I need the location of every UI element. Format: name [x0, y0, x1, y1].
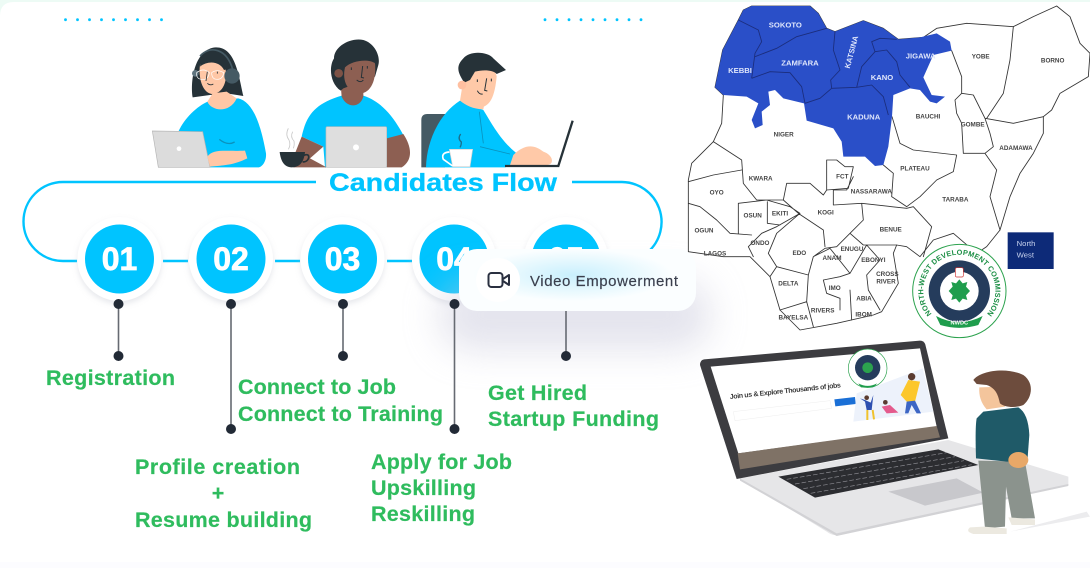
- step 04: [412, 217, 496, 301]
- connector 04: [450, 299, 460, 434]
- other state names: NASSARAWA: [851, 188, 892, 195]
- label: Profile creation + Resume building: [135, 455, 312, 532]
- blue state names: JIGAWA: [906, 52, 936, 61]
- other state names: GOMBE: [961, 121, 985, 128]
- other state names: [694, 54, 1065, 321]
- label: Get Hired / Startup Funding: Startup Funding: [488, 407, 659, 431]
- step 04: 04: [436, 241, 472, 277]
- shadow: [1010, 512, 1090, 532]
- step 05: [524, 217, 608, 301]
- step 02: 02: [213, 241, 249, 277]
- woman with headphones: [152, 47, 266, 167]
- other state names: BORNO: [1041, 58, 1065, 65]
- other state names: EBONYI: [861, 257, 886, 264]
- other state names: ADAMAWA: [999, 145, 1033, 152]
- label: Connect to Job / Training: Connect to Training: [238, 402, 443, 426]
- label: Get Hired / Startup Funding: Get Hired: [488, 381, 587, 405]
- other state names: BAYELSA: [778, 314, 809, 321]
- state borders inside the North West: [738, 20, 910, 115]
- other state names: OSUN: [744, 213, 762, 220]
- other state names: BENUE: [880, 227, 902, 234]
- portal illustration: [853, 368, 933, 422]
- portal logo: [848, 349, 887, 388]
- logo: North-West Development Commission: NWDC: [951, 321, 968, 327]
- hands: [1008, 452, 1028, 468]
- trackpad: [888, 478, 983, 506]
- label: Apply for Job / Upskilling / Reskilling: Upskilling: [371, 476, 476, 500]
- blue state names: ZAMFARA: [781, 58, 819, 67]
- man in turtleneck at laptop: [421, 53, 573, 167]
- boy figure: [968, 370, 1090, 534]
- connector segments between steps: [163, 260, 524, 262]
- title: Candidates Flow: Candidates Flow: [329, 169, 558, 197]
- other state names: DELTA: [778, 281, 799, 288]
- other state names: ONDO: [750, 240, 770, 247]
- connector 05: [561, 304, 571, 361]
- decorative dots left: [64, 18, 163, 21]
- blue state names: KADUNA: [847, 113, 881, 122]
- step 01: 01: [102, 241, 137, 277]
- other state names: TARABA: [942, 197, 969, 204]
- other state names: RIVERS: [811, 308, 834, 315]
- keyboard: [778, 449, 978, 498]
- label: Get Hired / Startup Funding: [488, 381, 659, 431]
- label: Apply for Job / Upskilling / Reskilling: Reskilling: [371, 502, 475, 526]
- man with dark hair and coffee: [280, 40, 410, 167]
- popup shadow: [440, 280, 710, 350]
- laptop screen bezel: [700, 341, 948, 479]
- blue state names: KATSINA: [843, 34, 860, 69]
- logo: North-West Development Commission: [912, 244, 1006, 338]
- laptop base: [740, 440, 1068, 535]
- popup: Video Empowerment: [459, 249, 696, 311]
- step 03: 03: [325, 241, 360, 277]
- popup label: Video Empowerment: [530, 273, 679, 290]
- other state names: CROSS: [876, 271, 899, 278]
- other state names: YOBE: [972, 54, 990, 61]
- blue state names: SOKOTO: [769, 20, 802, 29]
- other state names: RIVER: [876, 278, 896, 285]
- other state names: EKITI: [772, 211, 788, 218]
- other state names: FCT: [836, 174, 849, 181]
- other state names: KOGI: [818, 210, 834, 217]
- other state names: ENUGU: [841, 246, 864, 253]
- map: Nigeria with North West highlighted: [688, 6, 1090, 338]
- step 05: 05: [548, 241, 584, 277]
- illustration: laptop showing job portal and boy looking at it: [700, 340, 1090, 536]
- label: Connect to Job / Training: Connect to Job: [238, 375, 396, 399]
- other state names: EDO: [792, 250, 806, 257]
- other state names: OYO: [710, 190, 724, 197]
- icon: video camera: [476, 258, 520, 302]
- label: Apply for Job / Upskilling / Reskilling: [371, 450, 512, 526]
- country outline: [688, 6, 1090, 330]
- logo: North-West Development Commission: NORTH-WEST DEVELOPMENT COMMISSION: [918, 250, 1000, 317]
- other state names: IMO: [829, 285, 841, 292]
- legend box: North West: North: [1017, 239, 1035, 248]
- other state names: KWARA: [749, 175, 773, 182]
- screen: job portal page: Join us & Explore Thousands of jobs: [729, 382, 841, 401]
- shoes: [968, 517, 1035, 534]
- step 01: [78, 217, 162, 301]
- label: Profile creation + Resume building: Resume building: [135, 508, 312, 532]
- other state names: OGUN: [694, 227, 714, 234]
- label: Connect to Job / Training: [238, 375, 443, 426]
- blue state names: [728, 20, 936, 122]
- other state names: PLATEAU: [900, 166, 930, 173]
- blue state names: KEBBI: [728, 66, 752, 75]
- connector 03: [338, 299, 348, 361]
- other state names: IBOM: [855, 312, 872, 319]
- legend box: North West: West: [1017, 250, 1035, 259]
- legend box: North West: [1008, 232, 1054, 269]
- other state names: LAGOS: [704, 251, 726, 258]
- screen: job portal page: [711, 348, 940, 469]
- jacket: [976, 407, 1029, 462]
- illustration: three candidates at laptops: [152, 40, 574, 168]
- trousers: [978, 461, 1035, 528]
- connector 02: [226, 299, 236, 434]
- other state names: NIGER: [774, 131, 794, 138]
- head: [979, 387, 1005, 409]
- other state names: BAUCHI: [916, 114, 941, 121]
- decorative dots right: [544, 18, 642, 21]
- flow loop line: [24, 182, 662, 261]
- other state names: ANAM: [823, 255, 841, 262]
- North West states (blue): [715, 6, 952, 166]
- blue state names: KANO: [871, 73, 893, 82]
- label: Profile creation + Resume building: +: [212, 481, 224, 505]
- state borders: [688, 27, 1043, 327]
- label: Apply for Job / Upskilling / Reskilling: Apply for Job: [371, 450, 512, 474]
- connector 01: [114, 299, 124, 361]
- label: Registration: Registration: [46, 366, 175, 390]
- step 02: [189, 217, 273, 301]
- step 03: [300, 217, 384, 301]
- label: Profile creation + Resume building: Profile creation: [135, 455, 300, 479]
- other state names: ABIA: [856, 295, 872, 302]
